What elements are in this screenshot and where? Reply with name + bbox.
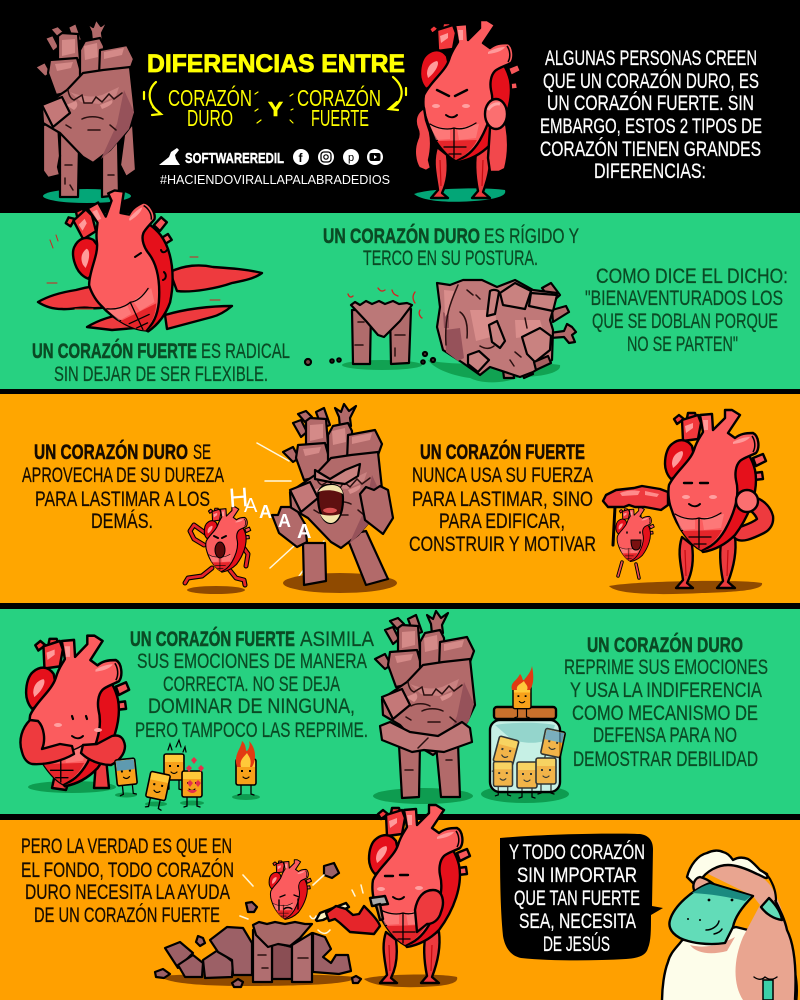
text: strong heart: ES RADICAL [201,340,290,363]
text: the truth: DURO NECESITA LA AYUDA [25,881,230,904]
illustration: screaming stone heart [272,404,397,593]
illustration: stone heart arms crossed [373,611,475,804]
text: hard heart [323,224,579,270]
arrow: left [144,82,161,115]
illustration: broken stone heart [305,280,576,382]
text: strong heart assimilates: SUS EMOCIONES DE MANERA [137,650,367,673]
illustration: strong heart with chisel [310,805,470,987]
text: hard heart hurts [22,440,224,533]
text: hard heart hurts: SE [193,441,211,464]
speech bubble: Y TODO CORAZÓN [509,841,645,864]
subtitle: hard and strong heart [168,85,381,131]
scream text: A [259,502,272,522]
panel: header [0,0,800,213]
illustration: emotion cubes [115,740,260,811]
text: hard heart represses [564,633,768,771]
illustration: sitting strong heart [20,636,129,793]
text: hard heart represses: DEFENSA PARA NO [593,724,737,747]
text: the truth: DE UN CORAZÓN FUERTE [34,904,220,927]
hashtag: #HACIENDOVIRALLAPALABRADEDIOS [160,172,390,187]
text: strong heart assimilates: CORRECTA. NO SE DEJA [163,673,340,696]
text: strong heart builds: PARA LASTIMAR, SINO [412,488,593,511]
text: hard heart: TERCO EN SU POSTURA. [363,247,538,270]
panel: help [0,805,800,1000]
scream text: A [244,495,258,517]
social icons: f [298,151,304,165]
speech bubble: DE JESÚS [543,933,610,956]
text: the truth: PERO LA VERDAD ES QUE EN [21,835,232,858]
text: strong heart assimilates: UN CORAZÓN FUERTE [130,627,295,651]
text: strong heart assimilates: DOMINAR DE NINGUNA, [148,695,355,718]
text: strong heart assimilates: ASIMILA [300,628,374,651]
text: strong heart builds: CONSTRUIR Y MOTIVAR [409,533,596,556]
text: strong heart builds: PARA EDIFICAR, [439,510,565,533]
sound lines [257,443,324,586]
speech bubble: QUE TAN FUERTE [514,887,640,910]
scream text: H [228,482,249,513]
panel: emotions [0,609,800,814]
text: strong heart assimilates [130,627,374,742]
text: strong heart builds [409,440,596,556]
text: strong heart [32,339,290,386]
text: the truth: EL FONDO, TODO CORAZÓN [21,859,234,882]
illustration: stone heart [35,19,136,203]
text: hard heart hurts: APROVECHA DE SU DUREZA [22,464,224,487]
illustration: flexible strong heart [38,176,262,347]
text: hard heart: UN CORAZÓN DURO [323,224,480,248]
illustration: rock pile and stump with small heart [155,860,361,987]
illustration: strong heart [414,20,521,202]
text: strong heart builds: NUNCA USA SU FUERZA [412,464,593,487]
scream text: A [297,521,311,543]
intro text [540,47,762,183]
speech bubble [500,834,663,960]
text: hard heart hurts: UN CORAZÓN DURO [34,440,188,464]
illustration: sheep [662,851,797,1000]
social icons: p [348,152,354,164]
text: strong heart: UN CORAZÓN FUERTE [32,339,197,363]
brand name: SOFTWAREREDIL [185,150,284,167]
text: strong heart: SIN DEJAR DE SER FLEXIBLE. [54,363,268,386]
text: strong heart assimilates: PERO TAMPOCO LAS REPRIME. [135,719,368,742]
subtitle: hard and strong heart: CORAZÓN [168,85,252,111]
subtitle: hard and strong heart: FUERTE [311,105,369,131]
social icons [293,149,383,165]
speech bubble: SIN IMPORTAR [517,864,637,887]
subtitle: hard and strong heart: CORAZÓN [297,85,381,111]
speech bubble: SEA, NECESITA [519,910,636,933]
illustration: jar of emotions [481,666,569,803]
subtitle: hard and strong heart: Y [268,99,284,121]
panel: flexible versus rigid [0,176,800,389]
logo [159,148,180,165]
illustration: fleeing small heart [185,507,251,594]
text: hard heart hurts: PARA LASTIMAR A LOS [35,488,210,511]
arrow: right [389,77,406,110]
intro text: DIFERENCIAS: [594,160,706,183]
text: hard heart represses: UN CORAZÓN DURO [587,633,743,657]
illustration: strong heart lifting small heart [603,410,773,594]
scream text [228,482,311,543]
text: the truth [21,835,234,927]
text: hard heart hurts: DEMÁS. [91,510,153,533]
text: saying [585,265,788,356]
text: saying: NO SE PARTEN" [627,333,738,356]
scream text: A [278,511,291,531]
subtitle: hard and strong heart: DURO [187,105,233,131]
text: hard heart: ES RÍGIDO Y [484,225,579,248]
panel: hurting versus building [0,394,800,603]
title: DIFERENCIAS ENTRE [147,50,405,78]
text: strong heart builds: UN CORAZÓN FUERTE [420,440,585,464]
